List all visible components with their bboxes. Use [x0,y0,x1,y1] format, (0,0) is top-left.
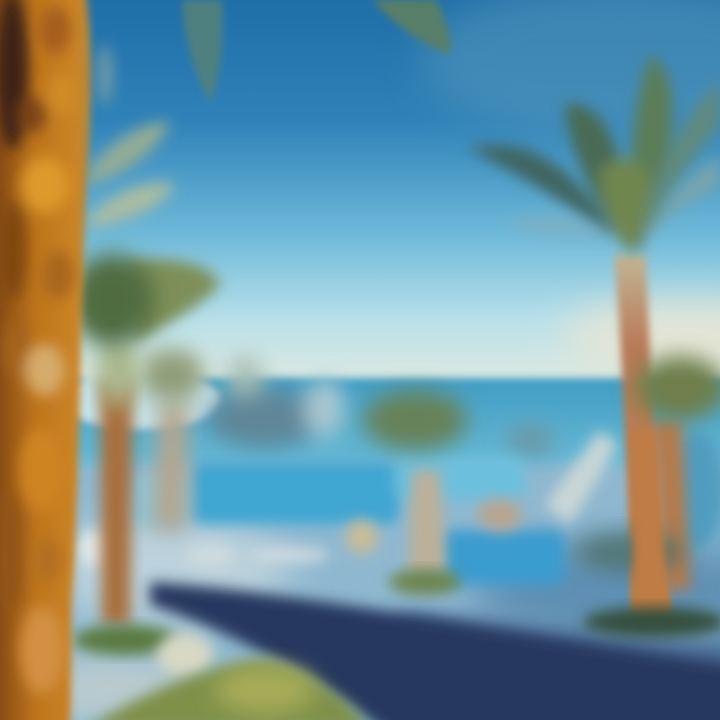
top fronds [182,0,450,102]
sun loungers and terrace details [77,430,618,566]
small palm: centre [363,390,467,595]
right palm trunk [614,255,670,620]
palm: left middle [70,254,220,655]
foreground bushes bottom left [85,633,370,720]
road [150,582,720,720]
large foreground palm trunk [0,0,91,720]
palm behind right trunk [575,356,720,590]
small palm: back left [140,349,204,530]
right palm tree [468,55,720,620]
right palm crown [468,55,720,255]
swimming pool [130,430,720,585]
sky [0,0,720,400]
right palm trunk foreground [630,430,670,620]
distant resort buildings [207,355,554,456]
upper-left palm fronds [88,45,176,228]
planter under right palm [583,607,720,637]
sea [0,372,720,473]
ground and terrace [0,465,720,720]
